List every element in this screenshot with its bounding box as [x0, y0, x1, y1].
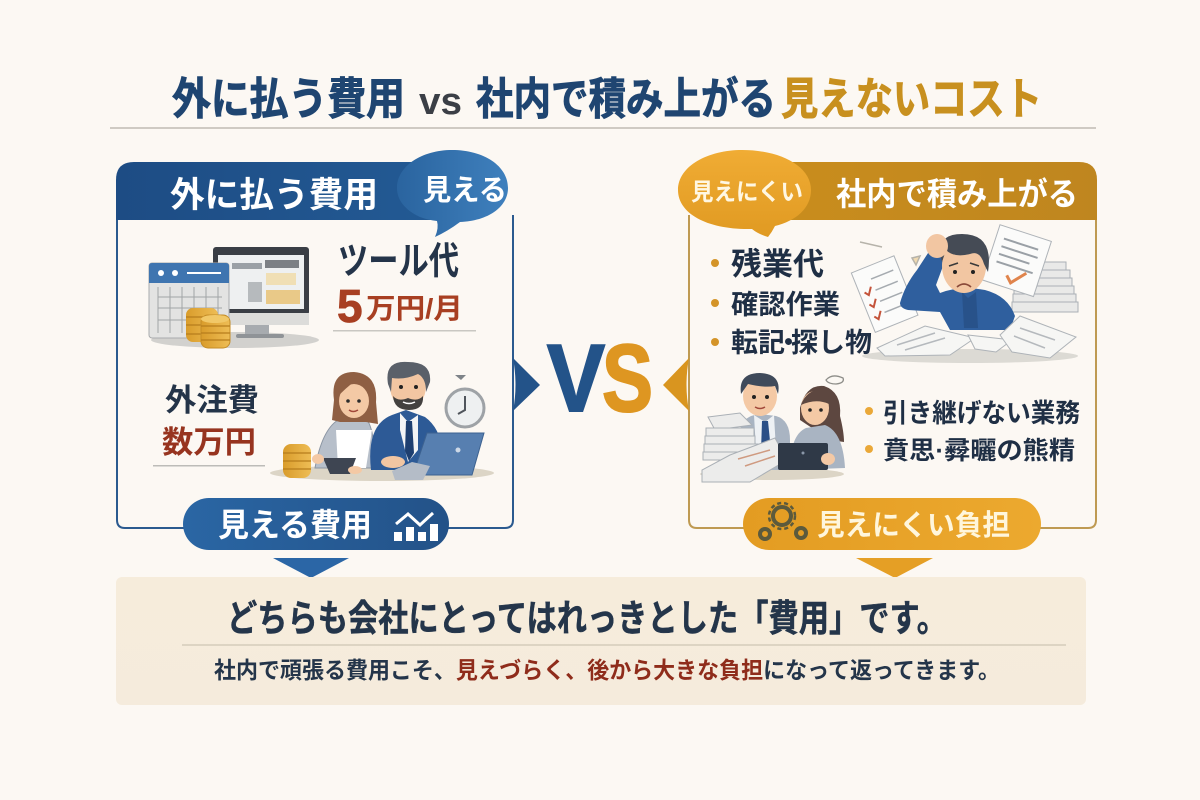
icon: gears	[760, 503, 806, 539]
panel: external costs	[116, 150, 513, 578]
title: 外に払う費用	[172, 75, 405, 124]
text: tool cost	[337, 241, 463, 332]
worker head	[942, 239, 986, 293]
text: outsourcing cost	[162, 383, 259, 460]
illustration: overwhelmed worker with papers	[851, 225, 1078, 363]
laptop	[413, 433, 484, 475]
speech bubble: 見えにくい	[678, 150, 811, 237]
title: 社内で積み上がる	[476, 75, 776, 124]
header text: 外に払う費用	[170, 176, 378, 215]
panel frame	[117, 215, 513, 528]
arrow: right pointing	[513, 358, 540, 411]
bullet list upper: 確認作業	[731, 290, 840, 320]
panel header	[780, 162, 1097, 220]
pill: visible cost: 見える費用	[218, 507, 372, 543]
tablet	[778, 443, 828, 470]
bullet list upper: 残業代	[731, 247, 824, 282]
speech bubble: 見えにくい: 見えにくい	[691, 179, 803, 206]
vs badge: V	[547, 325, 605, 432]
pill: visible cost	[183, 498, 449, 550]
woman	[315, 412, 374, 468]
panel frame	[689, 215, 1096, 528]
icon: bar chart with trend line	[394, 513, 438, 541]
text: tool cost: 5	[337, 280, 363, 332]
arrow down blue	[273, 558, 349, 578]
panel header	[116, 162, 440, 220]
speech bubble: 見える	[397, 150, 508, 237]
bullet list lower: 引き継げない業務	[883, 398, 1080, 428]
worker body	[900, 250, 1015, 330]
vs badge	[513, 325, 689, 432]
subline: 社内で頑張る費用こそ、見えづらく、後から大きな負担になって返ってきます。	[214, 657, 1000, 683]
vs badge: S	[602, 325, 653, 432]
text: tool cost: 万円/月	[366, 293, 463, 324]
clock	[446, 375, 484, 427]
speech bubble: 見える: 見える	[423, 175, 507, 207]
paper with check	[982, 225, 1051, 297]
title: 見えないコスト	[781, 75, 1042, 124]
arrow down orange	[856, 558, 933, 578]
icon: calendar, monitor and coins	[149, 247, 319, 348]
arrow: left pointing	[663, 358, 689, 411]
illustration: handover staff with stacked papers	[700, 373, 845, 482]
text: tool cost: ツール代	[338, 241, 459, 283]
panel: internal costs	[678, 150, 1097, 578]
checklist paper	[851, 256, 918, 332]
pill: hard-to-see burden	[743, 498, 1041, 550]
paper stack	[702, 413, 787, 482]
coins	[283, 444, 311, 478]
headline: どちらも会社にとってはれっきとした「費用」です。	[227, 598, 947, 639]
man	[740, 414, 790, 470]
header text: 社内で積み上がる	[836, 176, 1078, 212]
paper stack	[1012, 262, 1078, 312]
summary box	[116, 577, 1086, 705]
woman	[800, 386, 844, 442]
tablet	[323, 458, 356, 474]
bullet list lower: 賁思·彛曬の熊精	[883, 437, 1075, 465]
illustration: two staff with laptop, clock and coins	[270, 362, 494, 481]
man	[370, 410, 442, 470]
text: outsourcing cost: 数万円	[162, 425, 256, 460]
title: vs	[419, 81, 462, 123]
pill: hard-to-see burden: 見えにくい負担	[817, 509, 1010, 542]
bullet list lower	[865, 398, 1080, 465]
title	[172, 75, 1042, 124]
bullet list upper: 転記・探し物	[731, 328, 872, 358]
bullet list upper	[711, 247, 872, 358]
text: outsourcing cost: 外注費	[165, 383, 259, 418]
loose papers	[877, 326, 975, 356]
